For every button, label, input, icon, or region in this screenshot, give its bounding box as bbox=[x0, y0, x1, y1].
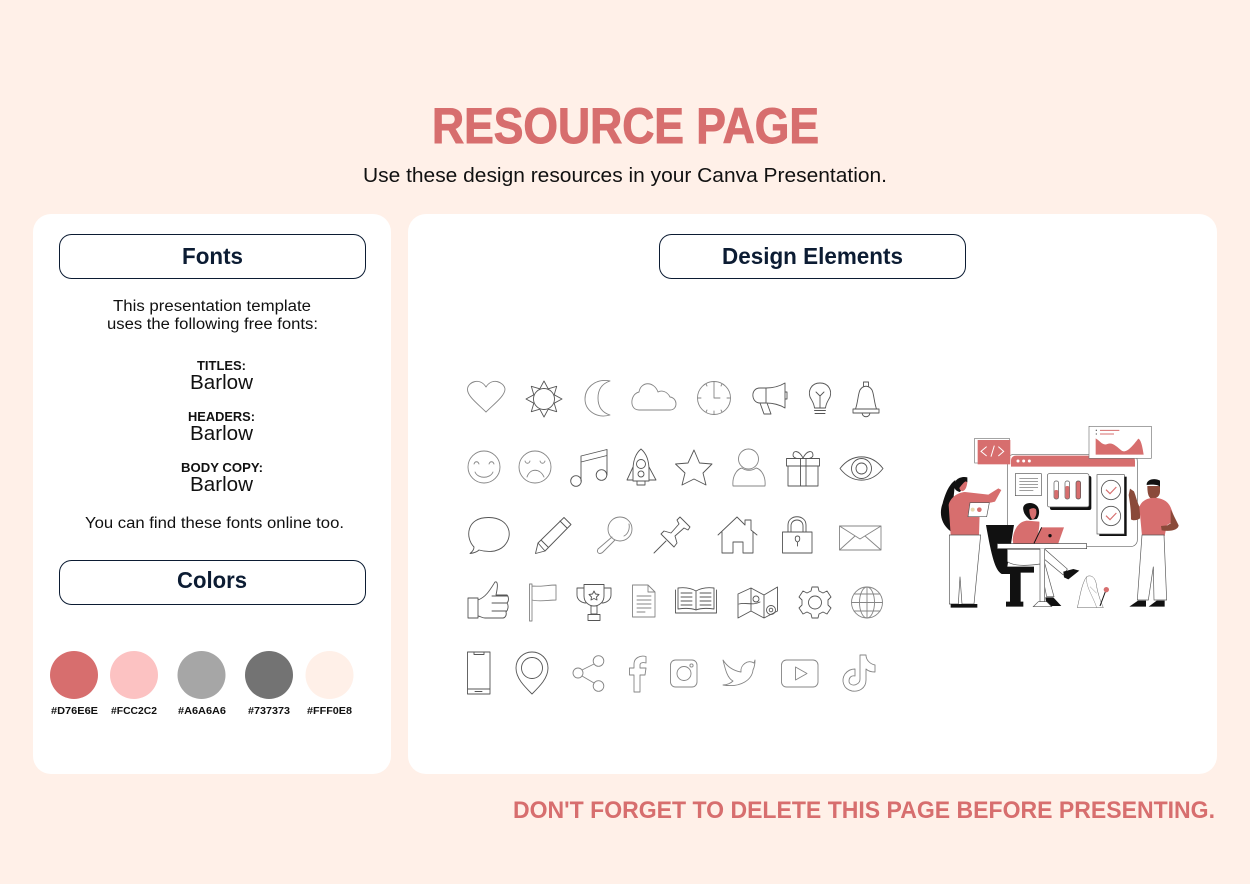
heading: colors bbox=[60, 560, 366, 604]
text block: headers font bbox=[188, 409, 255, 445]
text block: headers font: HEADERS: bbox=[188, 409, 255, 424]
icon: user bbox=[733, 449, 765, 486]
color swatch: FFF0E8 bbox=[306, 651, 354, 717]
icon: sun bbox=[526, 381, 562, 417]
icon: tiktok bbox=[843, 655, 875, 691]
icon: youtube bbox=[782, 660, 818, 687]
subtitle: Use these design resources in your Canva Presentation. bbox=[363, 165, 887, 187]
icon: house bbox=[718, 517, 757, 553]
icon: document bbox=[632, 585, 655, 617]
icon: push pin bbox=[654, 517, 690, 553]
heading: fonts: Fonts bbox=[182, 243, 243, 269]
icon: share bbox=[573, 656, 604, 691]
text block: body copy font: BODY COPY: bbox=[181, 460, 263, 475]
text block: fonts note: You can find these fonts online too. bbox=[85, 515, 344, 532]
icon: open book bbox=[676, 588, 716, 613]
window panel bbox=[1007, 454, 1137, 547]
area chart card bbox=[1089, 426, 1151, 458]
heading: design elements bbox=[660, 234, 966, 278]
icon: bell bbox=[853, 382, 879, 417]
icon: padlock bbox=[782, 517, 812, 553]
icon: location pin bbox=[516, 652, 548, 694]
icon: pencil bbox=[536, 518, 571, 554]
icon: smiley face bbox=[468, 451, 500, 483]
footer note: DON'T FORGET TO DELETE THIS PAGE BEFORE PRESENTING. bbox=[513, 797, 1215, 824]
text block: headers font: Barlow bbox=[190, 423, 254, 445]
color swatch: FFF0E8: #FFF0E8 bbox=[307, 706, 352, 717]
table bbox=[997, 544, 1087, 607]
person: seated woman with chair bbox=[986, 503, 1079, 607]
icon: cloud bbox=[632, 384, 676, 410]
text block: body copy font bbox=[181, 460, 263, 496]
icon: speech bubble bbox=[469, 517, 509, 554]
icon: light bulb bbox=[809, 383, 831, 414]
icon: globe bbox=[852, 587, 882, 618]
color swatch: FCC2C2 bbox=[110, 651, 158, 717]
icon: rocket bbox=[627, 449, 656, 485]
color swatch: FCC2C2: #FCC2C2 bbox=[111, 706, 157, 717]
color swatch: A6A6A6: #A6A6A6 bbox=[178, 706, 226, 717]
icon: envelope bbox=[840, 526, 881, 550]
text block: fonts intro: uses the following free fonts: bbox=[107, 316, 318, 333]
color swatch: D76E6E bbox=[50, 651, 98, 717]
color swatch: D76E6E: #D76E6E bbox=[51, 706, 98, 717]
heading: fonts bbox=[60, 234, 366, 278]
icon: twitter bbox=[723, 660, 755, 686]
icon: megaphone bbox=[753, 383, 787, 414]
icon: smartphone bbox=[468, 652, 490, 694]
title: RESOURCE PAGE bbox=[432, 98, 819, 154]
text block: fonts intro: This presentation template bbox=[113, 298, 311, 315]
text block: titles font: Barlow bbox=[190, 372, 254, 394]
icon: star bbox=[676, 450, 712, 485]
gauges card bbox=[1047, 474, 1091, 510]
icon: music note bbox=[571, 450, 607, 486]
icon: heart bbox=[467, 381, 505, 412]
panel: fonts and colors bbox=[33, 214, 391, 774]
icon: eye bbox=[840, 457, 883, 480]
icon: facebook bbox=[630, 656, 646, 692]
icon: moon bbox=[585, 380, 610, 416]
icon: clock bbox=[698, 382, 730, 414]
text block: titles font bbox=[190, 358, 254, 394]
color swatch: 737373 bbox=[245, 651, 293, 717]
text card bbox=[1015, 474, 1041, 496]
text block: fonts intro bbox=[107, 298, 318, 333]
text block: titles font: TITLES: bbox=[197, 358, 246, 373]
icon: flag bbox=[530, 584, 556, 621]
person: right man bbox=[1129, 479, 1179, 607]
icon: gear bbox=[799, 587, 831, 618]
checklist card bbox=[1097, 475, 1127, 536]
panel: design elements bbox=[408, 214, 1217, 774]
color swatch: 737373: #737373 bbox=[248, 706, 290, 717]
color swatch: A6A6A6 bbox=[178, 651, 226, 717]
illustration: team at dashboard bbox=[941, 426, 1179, 608]
icon: gift box bbox=[786, 452, 820, 486]
icon: sad face bbox=[519, 451, 551, 483]
icon: map bbox=[738, 587, 778, 618]
person: left woman bbox=[941, 477, 1001, 608]
plant bbox=[1077, 576, 1109, 608]
icon: instagram bbox=[670, 660, 697, 687]
icon: thumbs up bbox=[468, 582, 508, 618]
code tag bbox=[975, 438, 1010, 464]
icon: trophy bbox=[577, 584, 611, 620]
heading: colors: Colors bbox=[177, 567, 247, 593]
text block: body copy font: Barlow bbox=[190, 474, 254, 496]
heading: design elements: Design Elements bbox=[722, 243, 903, 269]
icon: magnifying glass bbox=[597, 517, 632, 553]
